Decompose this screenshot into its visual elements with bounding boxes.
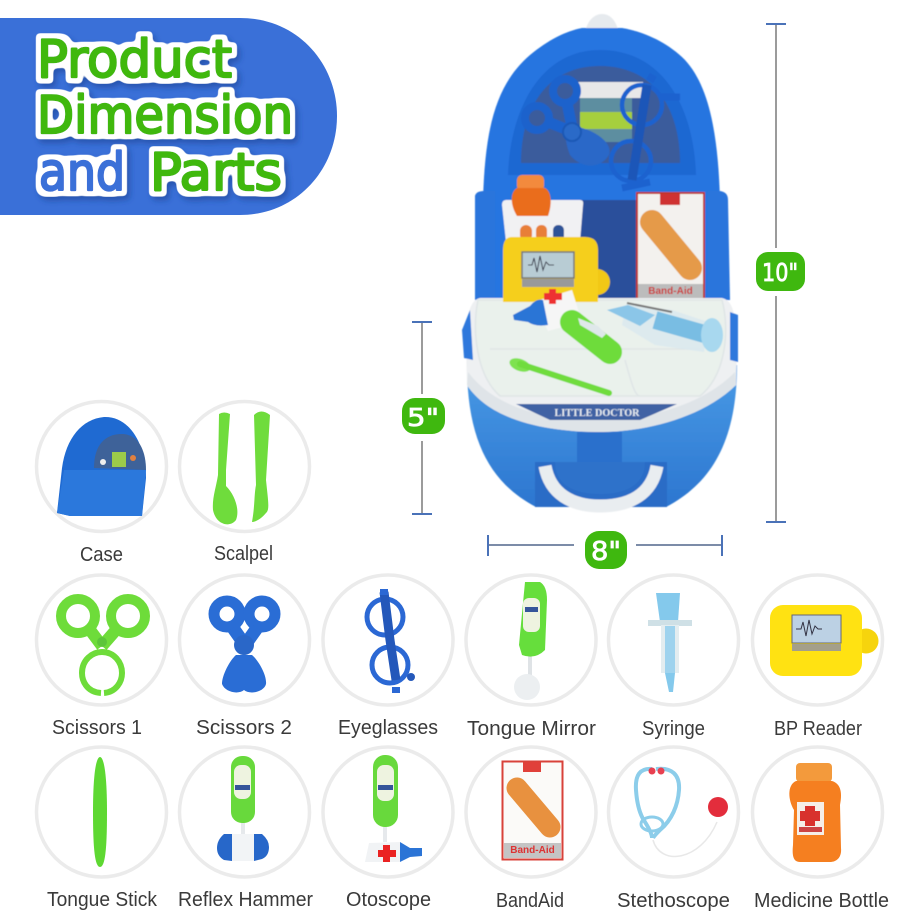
- label: Tongue Stick: [47, 889, 158, 911]
- dimension: height 10 inches: 10": [762, 258, 798, 287]
- dimension: height 10 inches: [750, 24, 810, 522]
- part: scissors 1: [36, 575, 166, 739]
- part: syringe: [608, 575, 738, 740]
- part: scalpel: [180, 402, 310, 565]
- label: BandAid: [496, 890, 564, 912]
- blue eyeglasses in lid: [611, 76, 680, 188]
- case base: [467, 365, 737, 507]
- label: Scissors 1: [52, 717, 142, 739]
- title banner: [0, 18, 337, 215]
- label: Scalpel: [214, 543, 273, 565]
- title text: Dimension: [37, 86, 293, 146]
- part: otoscope: [323, 747, 453, 911]
- orange bottle: [512, 175, 551, 216]
- part: tongue stick: [36, 747, 166, 911]
- label: Medicine Bottle: [754, 890, 889, 912]
- part: reflex hammer: [178, 747, 313, 911]
- title text: [37, 30, 293, 203]
- part: bandaid: Band-Aid: [510, 845, 555, 856]
- label: Eyeglasses: [338, 717, 438, 739]
- dimension: depth 5 inches: [398, 322, 450, 514]
- title text: Product: [37, 30, 232, 90]
- picture window: [578, 82, 643, 142]
- title text: and: [39, 143, 125, 203]
- label: Syringe: [642, 718, 705, 740]
- yellow BP reader: [503, 237, 610, 302]
- green tongue mirror on tray: [508, 356, 609, 393]
- part: medicine bottle: [752, 747, 889, 912]
- handle: [545, 466, 657, 506]
- part: eyeglasses: [323, 575, 453, 739]
- label: Tongue Mirror: [467, 718, 596, 740]
- dimension: width 8 inches: 8": [591, 537, 621, 567]
- product photo: open doctor case: [462, 14, 738, 507]
- syringe on tray: [607, 303, 723, 352]
- blue scissors in lid: [525, 79, 610, 166]
- dimension: width 8 inches: [488, 531, 722, 569]
- case lid: [475, 14, 730, 300]
- brand text: LITTLE DOCTOR: [554, 407, 640, 419]
- label: Otoscope: [346, 889, 431, 911]
- label: Scissors 2: [196, 717, 292, 739]
- part: case: [36, 402, 166, 566]
- bandaid card: Band-Aid: [648, 286, 693, 297]
- part: scissors 2: [180, 575, 310, 739]
- tray: [462, 298, 738, 432]
- part: tongue mirror: [466, 575, 596, 740]
- part: stethoscope: [608, 747, 738, 912]
- label: BP Reader: [774, 718, 862, 740]
- label: Reflex Hammer: [178, 889, 313, 911]
- part: BP reader: [752, 575, 882, 740]
- label: Stethoscope: [617, 890, 730, 912]
- bandaid card: [637, 193, 704, 298]
- white basket: [502, 200, 583, 242]
- title text: Parts: [150, 143, 282, 203]
- dimension: depth 5 inches: 5": [407, 403, 439, 432]
- otoscope on tray: [513, 289, 610, 352]
- part: bandaid: [466, 747, 596, 912]
- label: Case: [80, 544, 123, 566]
